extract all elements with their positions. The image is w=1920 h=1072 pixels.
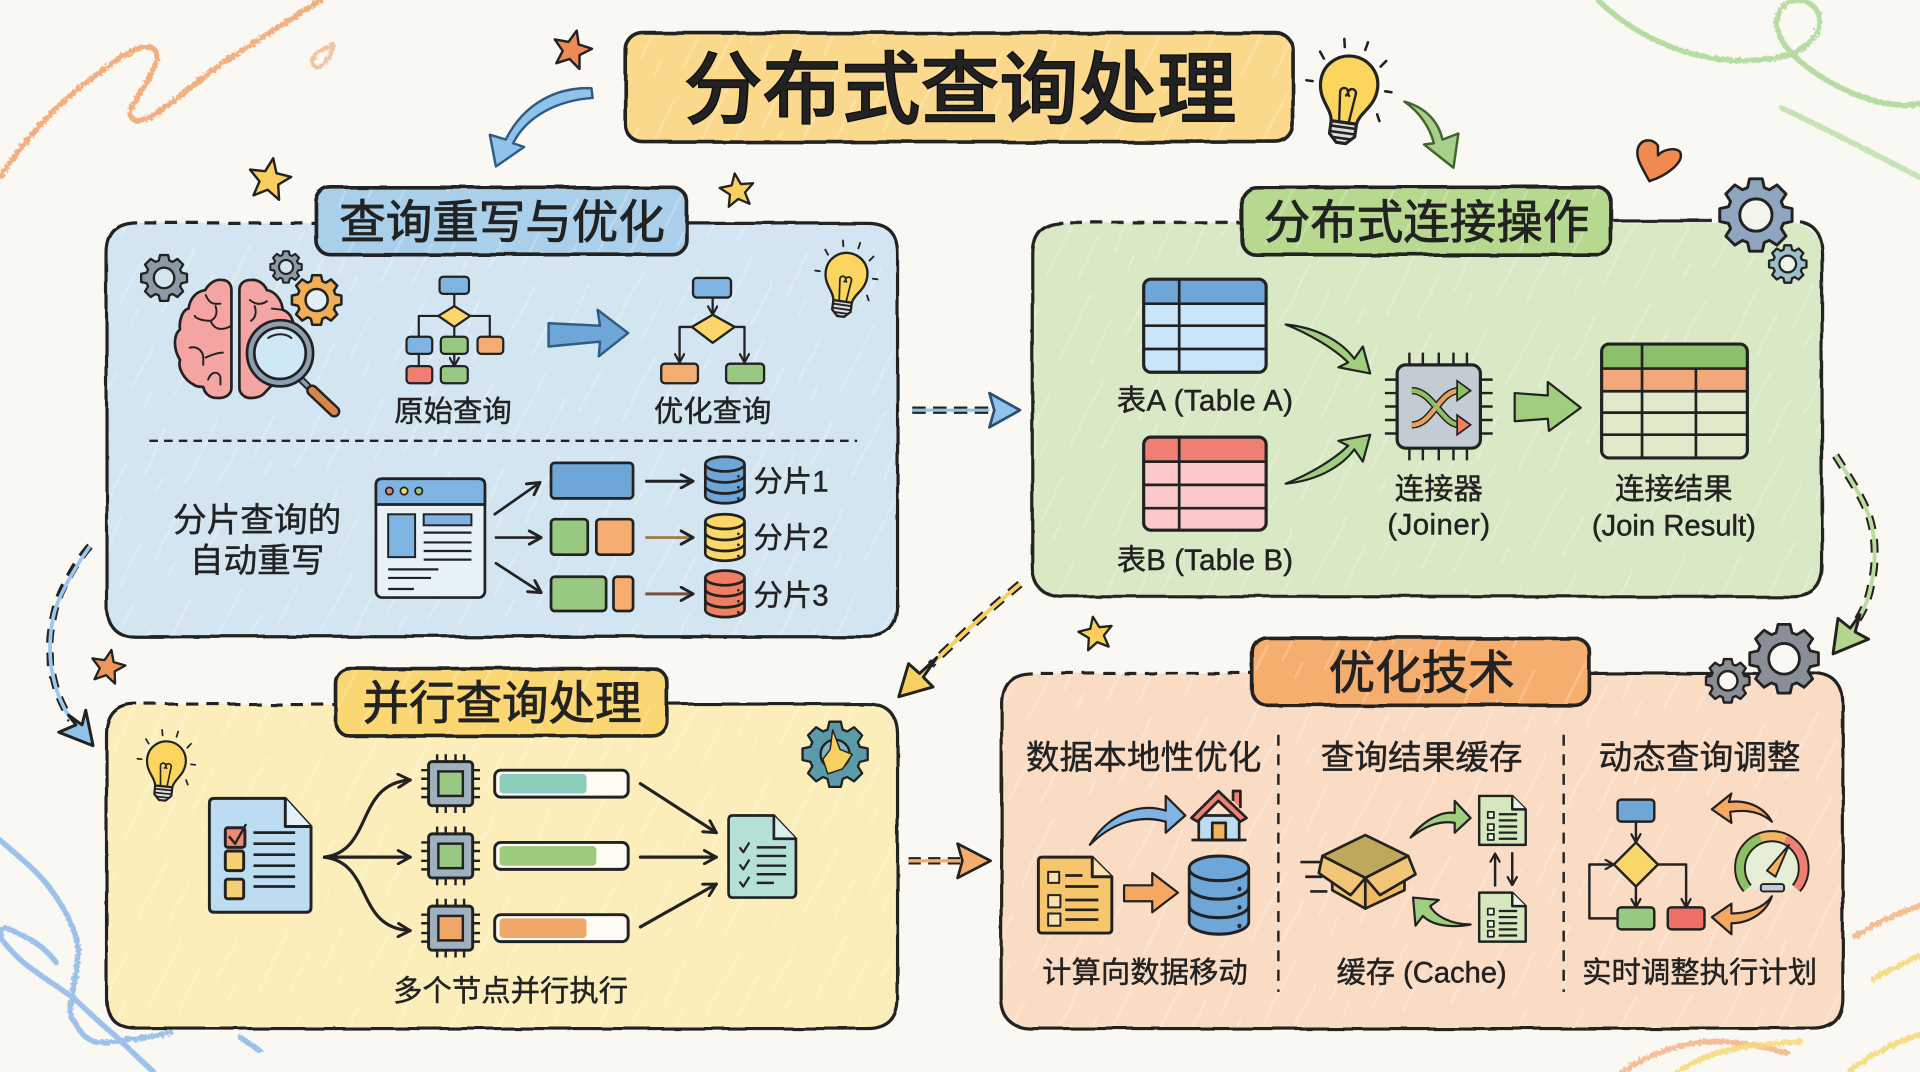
chart: dynamic flowchart <box>1589 800 1704 929</box>
label: original query: 原始查询 <box>394 396 512 429</box>
label: cache: 缓存 (Cache) <box>1337 956 1507 989</box>
header: query rewrite: 查询重写与优化 <box>339 196 665 248</box>
icon: joiner chip <box>1385 353 1493 460</box>
node 3: chip and progress bar <box>421 899 628 958</box>
shard row 2 <box>551 514 829 561</box>
header: distributed join <box>1242 187 1611 255</box>
label: realtime plan adjustment: 实时调整执行计划 <box>1582 956 1817 989</box>
heading: dynamic adjustment: 动态查询调整 <box>1599 739 1801 777</box>
icon: title bulb <box>1298 35 1398 149</box>
label: joiner <box>1387 473 1490 541</box>
header: query rewrite <box>316 187 687 255</box>
chart: table A <box>1144 279 1266 372</box>
icon: cached documents <box>1479 796 1526 942</box>
icon: parallel bulb <box>133 728 199 803</box>
connector: parallel to optimization <box>909 844 991 878</box>
panel: parallel processing background <box>107 704 898 1029</box>
shard row 1: 分片1 <box>753 465 829 498</box>
label: compute moves to data: 计算向数据移动 <box>1042 956 1248 989</box>
icon: task document <box>209 798 311 912</box>
label: join result: 连接结果 <box>1615 473 1733 506</box>
connector: join to parallel <box>899 584 1020 697</box>
header: parallel processing: 并行查询处理 <box>362 678 642 730</box>
label: table A: 表A (Table A) <box>1117 385 1293 418</box>
label: joiner: (Joiner) <box>1387 508 1490 541</box>
label: table B: 表B (Table B) <box>1117 544 1293 577</box>
icon: brain with gears and magnifier <box>141 251 341 411</box>
shard row 1 <box>551 457 829 503</box>
arrow: joiner to result <box>1515 382 1581 431</box>
label: optimized query: 优化查询 <box>654 396 771 429</box>
connector: rewrite to join <box>912 393 1020 427</box>
label: join result <box>1592 473 1756 543</box>
icon: rewrite bulb <box>809 237 882 321</box>
arrow: table B to joiner <box>1286 435 1370 484</box>
arrows: fan out to nodes <box>324 780 410 931</box>
header: parallel processing <box>336 669 667 736</box>
shard row 3: 分片3 <box>753 579 829 612</box>
icon: gauge <box>1735 831 1809 891</box>
arrow: data to home <box>1090 796 1185 845</box>
chart: original query flowchart <box>407 277 503 383</box>
label: automatic shard rewriting <box>173 502 341 580</box>
icon: cracked gear <box>803 722 868 787</box>
icon: browser query window <box>376 479 485 598</box>
icon: result document <box>729 816 796 898</box>
label: join result: (Join Result) <box>1592 510 1756 543</box>
arrow: title to join <box>1404 102 1458 168</box>
node 1: chip and progress bar <box>421 754 628 813</box>
node 2: chip and progress bar <box>421 827 628 885</box>
chart: optimized query flowchart <box>661 278 764 383</box>
title: 分布式查询处理 <box>684 46 1236 134</box>
arrows: nodes to result <box>640 784 716 927</box>
icon: data cylinder <box>1189 856 1249 934</box>
heading: result cache: 查询结果缓存 <box>1321 739 1523 777</box>
icon: join gears <box>1720 179 1806 283</box>
shard row 2: 分片2 <box>753 522 829 555</box>
divider: rewrite panel <box>149 440 857 442</box>
arrow: table A to joiner <box>1286 324 1370 373</box>
icon: optimization gears <box>1706 624 1818 703</box>
chart: table B <box>1144 437 1266 530</box>
arrow: original to optimized <box>549 310 628 356</box>
header: distributed join: 分布式连接操作 <box>1264 196 1589 248</box>
panel: query rewrite background <box>107 223 898 637</box>
header: optimization <box>1253 638 1589 705</box>
arrows: browser to shards <box>495 482 541 593</box>
icon: compute document <box>1038 857 1112 933</box>
title <box>626 33 1293 142</box>
label: automatic shard rewriting: 自动重写 <box>190 542 324 580</box>
shard row 3 <box>551 571 829 617</box>
label: parallel execution: 多个节点并行执行 <box>393 975 628 1008</box>
panel: optimization background <box>1002 673 1843 1029</box>
label: automatic shard rewriting: 分片查询的 <box>173 502 341 540</box>
arrow: title to rewrite <box>490 88 593 167</box>
decorations: stars and heart <box>88 140 1681 685</box>
heading: data locality: 数据本地性优化 <box>1026 739 1261 777</box>
arrows: cache exchange <box>1411 801 1471 926</box>
panel: distributed join background <box>1032 220 1822 596</box>
icon: cache box <box>1300 835 1416 909</box>
arrow: compute to data <box>1124 873 1178 912</box>
label: joiner: 连接器 <box>1395 473 1483 506</box>
connector: rewrite to parallel <box>50 546 93 746</box>
icon: house <box>1191 791 1247 840</box>
dividers: optimization columns <box>1278 735 1564 992</box>
chart: join result table <box>1602 344 1747 458</box>
arrows: dynamic feedback <box>1712 793 1772 934</box>
connector: join to optimization <box>1833 456 1875 654</box>
icon: title star <box>549 26 595 71</box>
header: optimization: 优化技术 <box>1329 647 1515 699</box>
